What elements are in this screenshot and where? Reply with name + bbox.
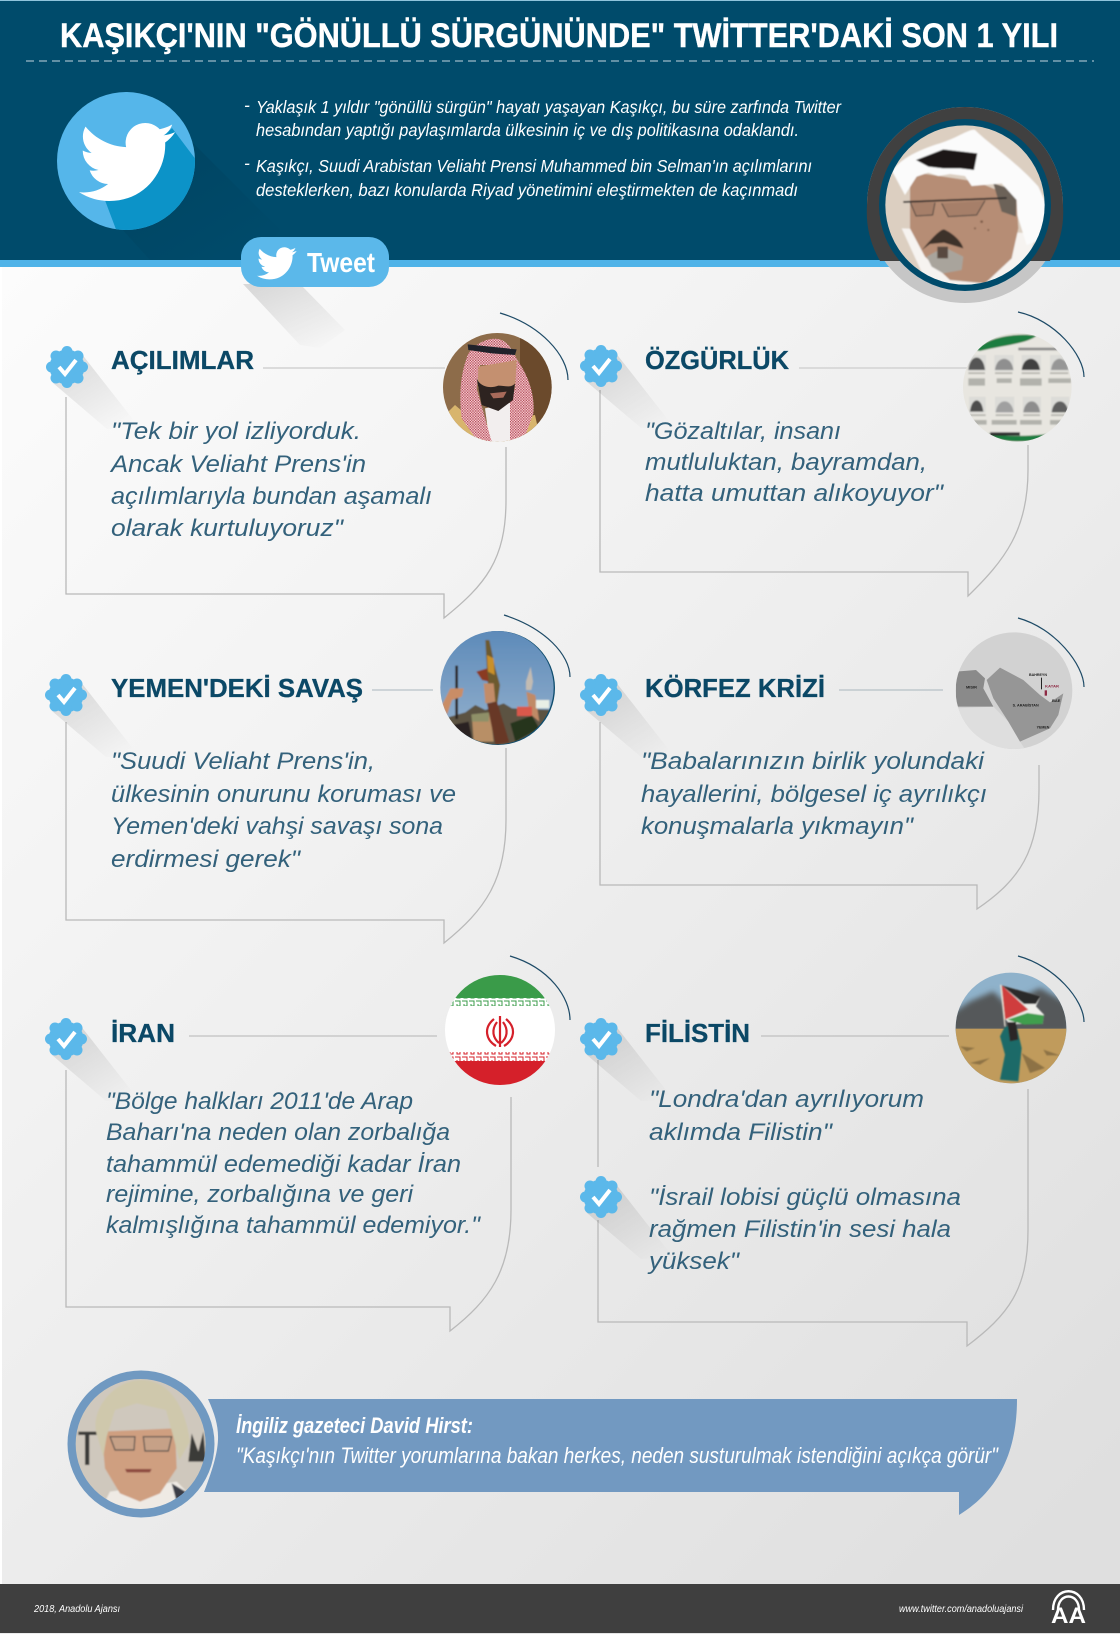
speech bubble outline	[66, 397, 506, 618]
quote one: aklımda Filistin"	[649, 1119, 833, 1146]
quote: tahammül edemediği kadar İran	[106, 1151, 461, 1178]
quote: "Gözaltılar, insanı	[645, 418, 841, 445]
map labels: BAHREYN	[1029, 672, 1047, 677]
heading: ÖZGÜRLÜK	[645, 345, 789, 375]
quote: hayallerini, bölgesel iç ayrılıkçı	[641, 781, 987, 808]
panel: İran	[45, 956, 570, 1331]
speech bubble outline	[66, 1070, 511, 1331]
icon: verified badge	[580, 345, 673, 428]
callout: David Hirst	[60, 1365, 1017, 1525]
quote: "Kaşıkçı'nın Twitter yorumlarına bakan herkes, neden susturulmak istendiğini açıkça görür"	[236, 1443, 999, 1468]
map labels: S. ARABİSTAN	[1013, 703, 1039, 708]
arc	[510, 956, 570, 1020]
map labels: YEMEN	[1037, 724, 1049, 729]
quote two: yüksek"	[647, 1248, 740, 1275]
quote: Ancak Veliaht Prens'in	[109, 451, 366, 478]
bullet two: -	[244, 153, 250, 173]
ribbon	[204, 1399, 1017, 1515]
quote: olarak kurtuluyoruz"	[111, 515, 344, 542]
account: www.twitter.com/anadoluajansi	[899, 1604, 1024, 1615]
quote	[109, 418, 432, 542]
quote: "Bölge halkları 2011'de Arap	[106, 1088, 413, 1115]
icon: verified badge	[580, 1018, 673, 1101]
bullet two: desteklerken, bazı konularda Riyad yönetimini eleştirmekten de kaçınmadı	[256, 180, 798, 200]
heading: İRAN	[111, 1018, 175, 1048]
panel: Açılımlar	[46, 313, 568, 618]
arc	[500, 313, 568, 380]
photo: Jamal Khashoggi	[866, 107, 1064, 303]
quote: erdirmesi gerek"	[111, 846, 301, 873]
panel: Yemen'deki Savaş	[45, 615, 570, 943]
bullet one: Yaklaşık 1 yıldır "gönüllü sürgün" hayatı yaşayan Kaşıkçı, bu süre zarfında Twitter	[256, 97, 842, 117]
quote one	[649, 1086, 924, 1146]
quote two: "İsrail lobisi güçlü olmasına	[649, 1184, 961, 1211]
map labels: KATAR	[1045, 683, 1059, 688]
image: detainee portraits	[963, 333, 1072, 442]
map labels: BAE	[1052, 698, 1061, 703]
footer	[0, 1584, 1120, 1633]
header band	[0, 0, 1120, 267]
icon: verified badge	[46, 346, 139, 429]
photo: woman with Palestinian flag	[956, 972, 1066, 1084]
bullet one	[244, 95, 842, 140]
arc	[1018, 312, 1084, 377]
quote: Baharı'na neden olan zorbalığa	[106, 1119, 450, 1146]
portrait: David Hirst	[68, 1370, 214, 1518]
arc	[1018, 956, 1084, 1022]
panel: Özgürlük	[580, 312, 1084, 596]
photo: armed crowd	[440, 631, 555, 745]
icon: verified badge two	[580, 1176, 673, 1259]
bullet one: hesabından yaptığı paylaşımlarda ülkesinin iç ve dış politikasına odaklandı.	[256, 120, 799, 140]
map: Gulf region	[956, 632, 1072, 749]
quote: kalmışlığına tahammül edemiyor."	[106, 1212, 481, 1239]
speech bubble outline	[600, 722, 1039, 909]
quote: Yemen'deki vahşi savaşı sona	[111, 813, 443, 840]
icon: verified badge	[45, 674, 138, 757]
quote: mutluluktan, bayramdan,	[645, 449, 927, 476]
quote one: "Londra'dan ayrılıyorum	[649, 1086, 924, 1113]
quote: "Babalarınızın birlik yolundaki	[641, 748, 985, 775]
quote	[106, 1088, 481, 1239]
arc	[504, 615, 570, 677]
speech bubble outline	[598, 1060, 1028, 1346]
quote: rejimine, zorbalığına ve geri	[106, 1181, 414, 1208]
quote: hatta umuttan alıkoyuyor"	[645, 480, 944, 507]
quote	[641, 748, 987, 840]
speech bubble outline	[66, 722, 506, 943]
icon: verified badge	[580, 674, 673, 757]
panel: Filistin	[580, 956, 1084, 1346]
bullet one: -	[244, 95, 250, 115]
quote: ülkesinin onurunu koruması ve	[111, 781, 456, 808]
map labels	[966, 672, 1061, 729]
quote	[645, 418, 944, 507]
quote: açılımlarıyla bundan aşamalı	[111, 483, 432, 510]
icon: AA logo	[1051, 1591, 1086, 1628]
heading: FİLİSTİN	[645, 1018, 750, 1048]
tweet button: Tweet	[307, 247, 375, 278]
map labels: MISIR	[966, 684, 977, 689]
panel: Körfez Krizi	[580, 618, 1084, 909]
left edge strip	[0, 267, 2, 1584]
icon: verified badge	[45, 1018, 138, 1101]
icon: Iran flag	[445, 975, 555, 1086]
quote	[111, 748, 456, 873]
icon: AA logo: AA	[1051, 1603, 1086, 1628]
photo: Muhammed bin Selman	[443, 333, 552, 442]
heading: KÖRFEZ KRİZİ	[645, 673, 825, 703]
quote: konuşmalarla yıkmayın"	[641, 813, 914, 840]
quote two	[647, 1184, 961, 1275]
heading: YEMEN'DEKİ SAVAŞ	[111, 673, 363, 703]
quote: "Suudi Veliaht Prens'in,	[111, 748, 375, 775]
heading: AÇILIMLAR	[111, 345, 254, 375]
quote: "Tek bir yol izliyorduk.	[111, 418, 361, 445]
quote two: rağmen Filistin'in sesi hala	[649, 1216, 951, 1243]
tweet button	[241, 237, 389, 348]
credit: 2018, Anadolu Ajansı	[33, 1604, 120, 1615]
icon: twitter circle	[57, 92, 195, 230]
author: İngiliz gazeteci David Hirst:	[236, 1413, 473, 1438]
bullet two	[244, 153, 812, 200]
speech bubble outline	[600, 390, 1028, 596]
intro text	[244, 95, 842, 200]
arc	[1018, 618, 1084, 687]
bullet two: Kaşıkçı, Suudi Arabistan Veliaht Prensi Muhammed bin Selman'ın açılımlarını	[256, 156, 812, 176]
